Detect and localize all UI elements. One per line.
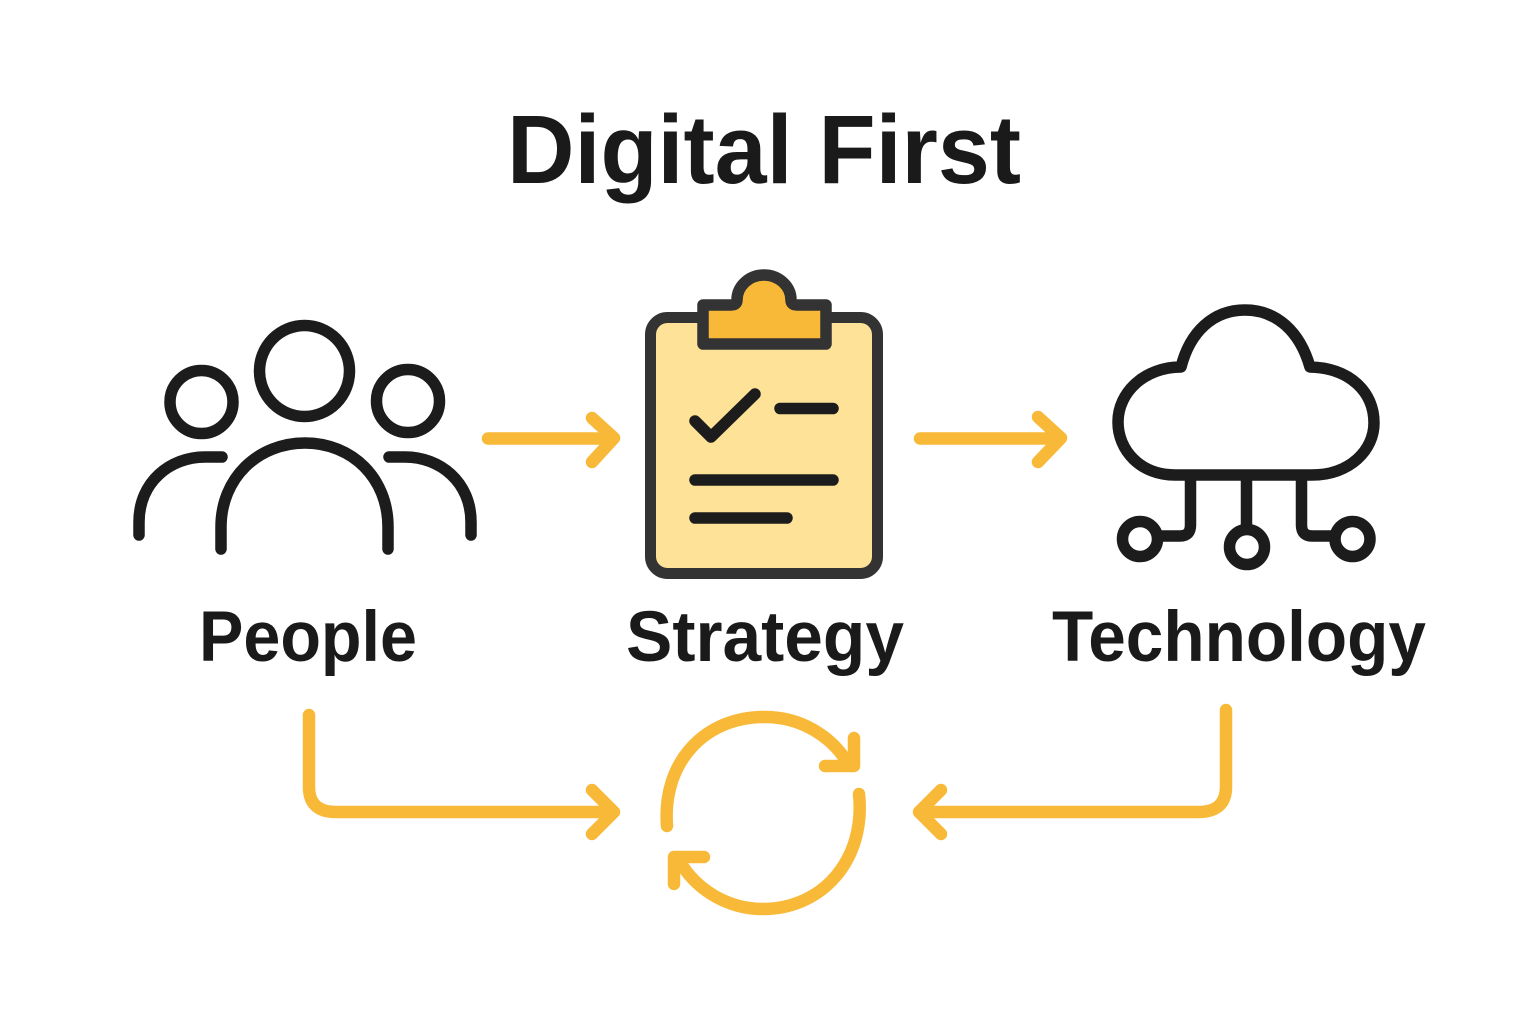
icon: people	[139, 326, 471, 549]
arrow: technology to cycle	[919, 710, 1226, 834]
icon: cycle arrows	[667, 717, 860, 909]
arrow: strategy to technology	[920, 417, 1061, 462]
icon: technology cloud	[1118, 310, 1374, 564]
title: Digital First	[507, 95, 1021, 204]
label: Strategy: Strategy	[626, 598, 904, 677]
arrow: people to cycle	[309, 715, 614, 834]
label: People: People	[199, 598, 417, 677]
label: Technology: Technology	[1052, 598, 1426, 677]
icon: strategy clipboard	[650, 275, 878, 574]
arrow: people to strategy	[488, 418, 614, 462]
